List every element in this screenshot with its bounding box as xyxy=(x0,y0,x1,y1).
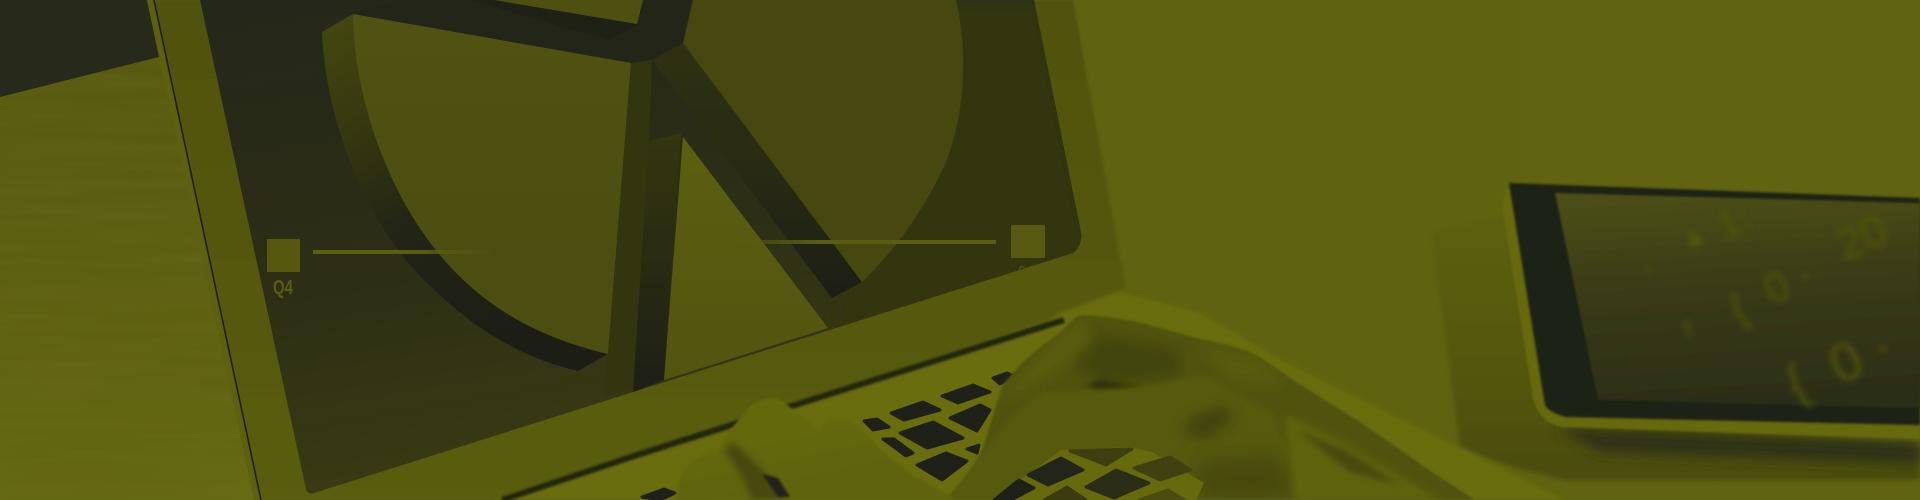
tablet bezel xyxy=(1509,183,1920,425)
right marker square xyxy=(1011,225,1045,258)
tablet shadow xyxy=(1556,428,1920,464)
vertical beam xyxy=(633,133,681,392)
tablet blurred code text: 1: xyxy=(1711,197,1758,248)
top dark band xyxy=(353,0,692,63)
fingers xyxy=(676,399,958,500)
finger shading xyxy=(724,442,785,500)
hand base tone xyxy=(940,310,1480,500)
gap shadow between fingers xyxy=(1087,379,1137,390)
tablet screen xyxy=(1555,193,1920,408)
tablet xyxy=(1502,183,1920,464)
right pie slice xyxy=(683,0,963,282)
right leader line xyxy=(762,240,996,244)
lid panel xyxy=(154,0,1126,500)
right screen tone xyxy=(832,3,1058,329)
top slice shadow xyxy=(470,0,640,40)
laptop lid xyxy=(147,0,1126,500)
palm lower dark tone xyxy=(1195,455,1300,500)
bottom pie slice xyxy=(664,137,828,380)
right hand xyxy=(940,310,1480,500)
left hand xyxy=(676,399,958,500)
back of hand highlight xyxy=(1285,415,1440,500)
lid outer dark line xyxy=(154,0,261,500)
lower finger xyxy=(952,382,1294,498)
tablet blurred code text: 20 xyxy=(1827,202,1896,271)
gap fill xyxy=(622,60,652,184)
dark wall corner xyxy=(0,0,159,97)
pie slice top xyxy=(494,0,643,24)
Q4 leader line xyxy=(313,250,456,254)
deck xyxy=(495,292,1566,500)
Q4 label: Q4 xyxy=(273,276,293,299)
lid light edge sliver xyxy=(147,0,262,500)
tablet blurred code text: { xyxy=(1722,285,1755,333)
upper knuckle light xyxy=(1210,343,1276,384)
Q4 marker square xyxy=(267,239,300,272)
dark gap between fingers xyxy=(762,474,790,497)
hinge shadow xyxy=(502,320,1064,500)
tablet blurred code text: ▲ xyxy=(1673,216,1714,258)
keyboard gap under the palm xyxy=(992,447,1204,500)
upper finger dark tone xyxy=(1075,335,1180,385)
tablet blurred code text: { xyxy=(1777,354,1816,412)
tablet blurred code text: 0 · xyxy=(1820,315,1902,396)
tablet blurred code text: 0 · xyxy=(1756,250,1820,313)
upper fingertip light xyxy=(1016,322,1100,390)
keys below right hand xyxy=(994,449,1191,500)
tablet blurred code text: , xyxy=(1634,245,1656,278)
left pie slice xyxy=(353,14,631,354)
back of hand dark stripe xyxy=(1304,434,1392,483)
knuckle shadow xyxy=(1184,406,1233,440)
tablet blurred code text xyxy=(1634,197,1902,412)
clipped marker label: Q xyxy=(1019,265,1025,274)
wood grain xyxy=(0,50,270,500)
right slice extrusion xyxy=(676,47,862,298)
left slice extrusion xyxy=(322,14,608,371)
laptop screen with 3D pie chart xyxy=(190,0,1090,500)
hand silhouette and shading xyxy=(940,310,1480,500)
desk surface xyxy=(0,57,254,500)
laptop deck and hinge xyxy=(495,292,1566,500)
tablet blurred code text: r xyxy=(1677,311,1699,343)
keyboard keys left group xyxy=(642,373,1014,500)
paper under tablet xyxy=(1431,215,1920,480)
tablet white frame xyxy=(1502,183,1920,439)
screen background xyxy=(190,0,1090,500)
